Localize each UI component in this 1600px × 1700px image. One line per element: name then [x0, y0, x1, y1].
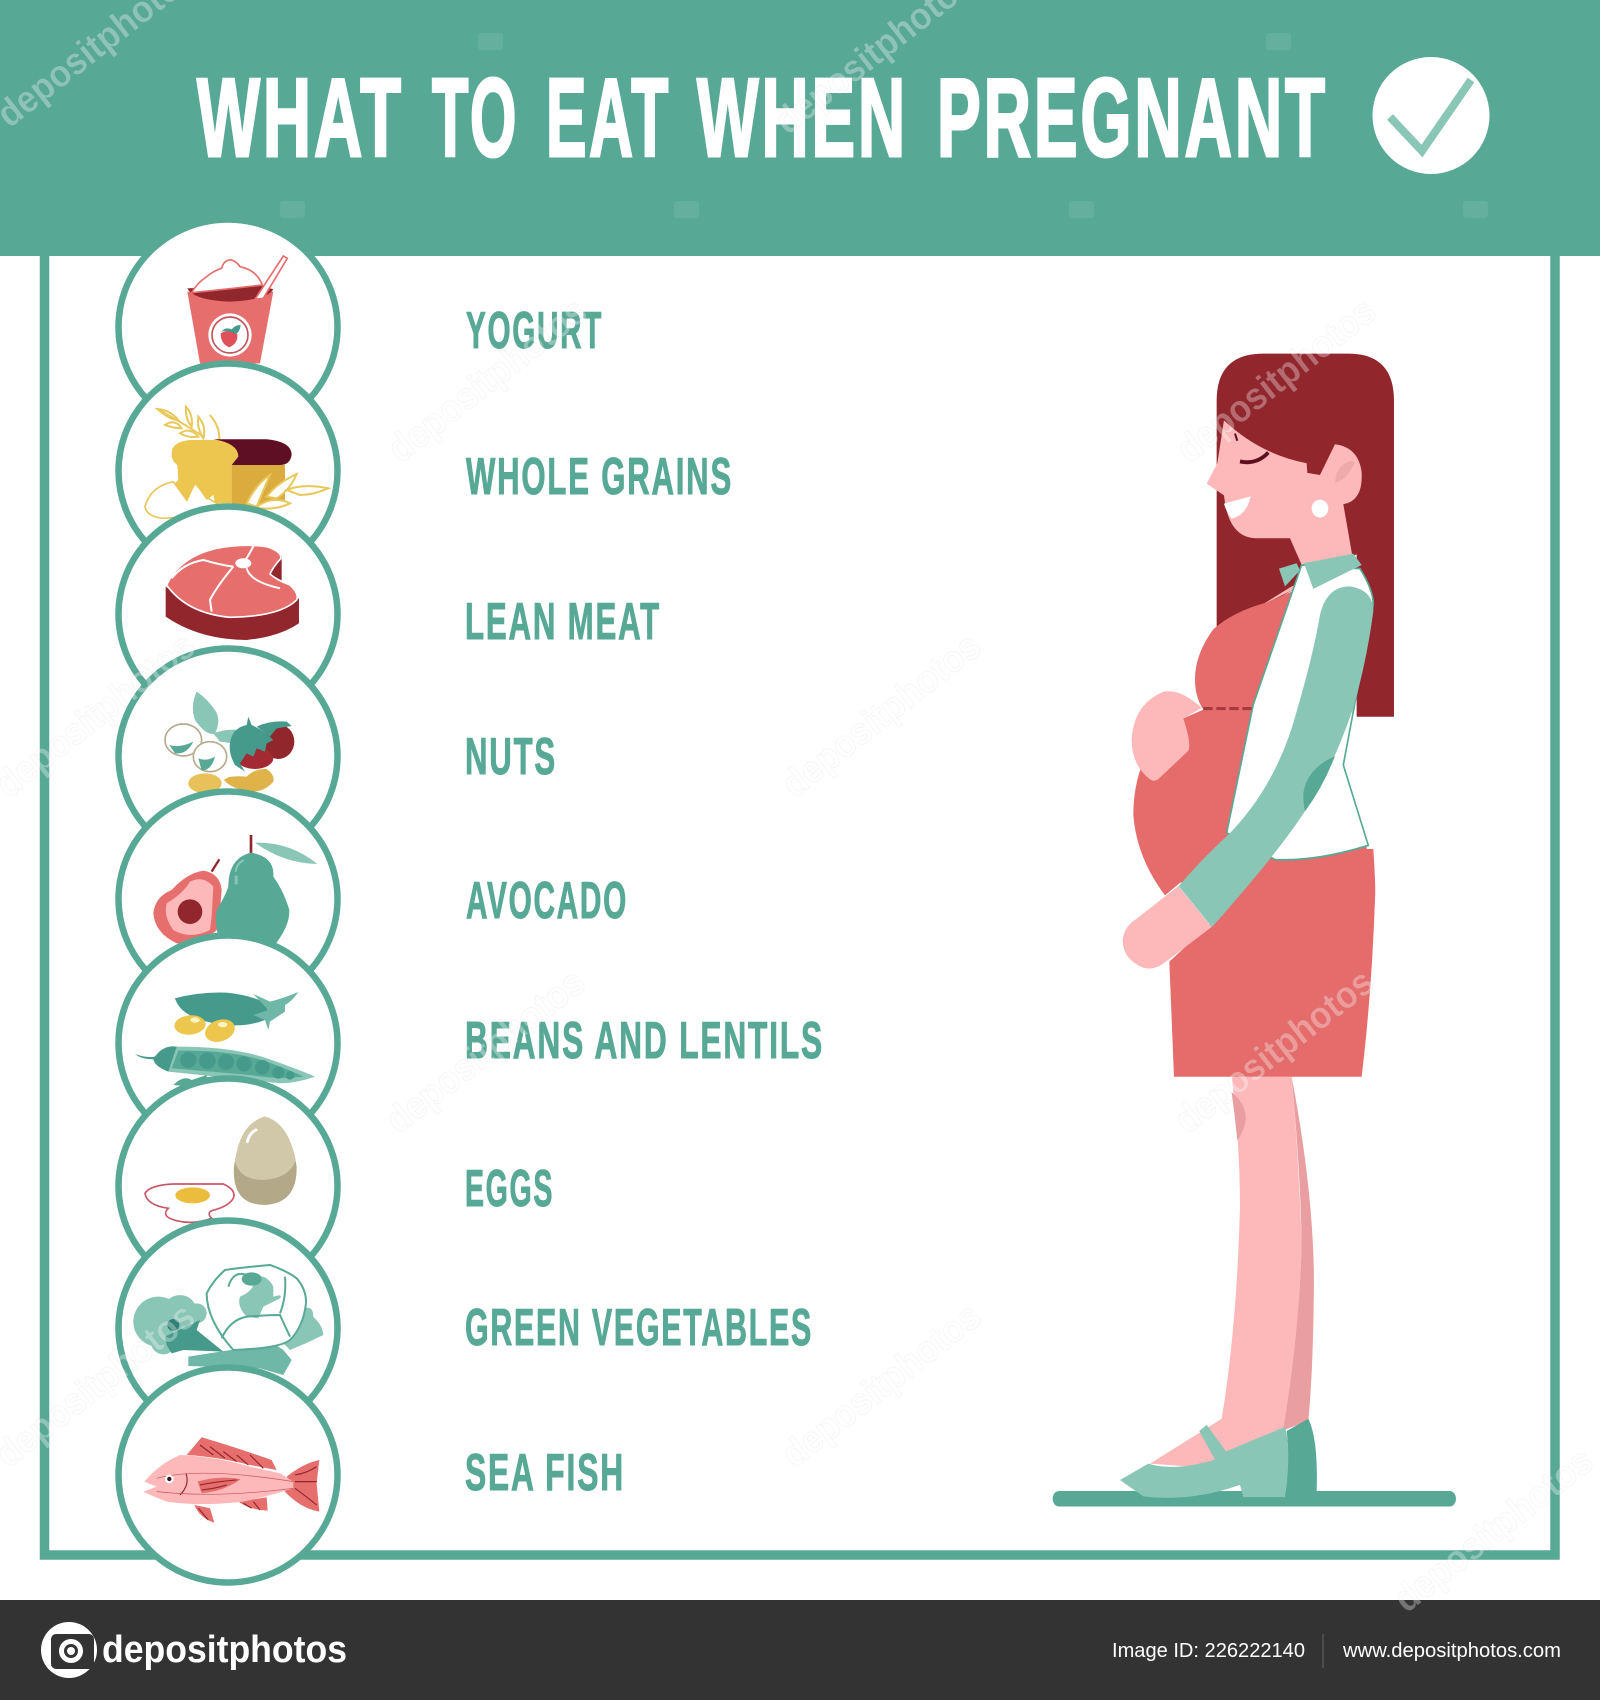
- legs and shoes: [1053, 847, 1456, 1507]
- label: yogurt: YOGURT: [466, 302, 603, 360]
- head, torso and arms: [1132, 420, 1373, 927]
- food item: nuts: [118, 648, 338, 864]
- food item: whole grains: [118, 364, 338, 578]
- footer logo wordmark: depositphotos: [102, 1629, 347, 1671]
- footer logo icon: [41, 1622, 97, 1678]
- label: nuts: NUTS: [465, 728, 557, 786]
- title: WHAT: [197, 56, 404, 180]
- title: EAT: [546, 56, 671, 180]
- label: lean meat: LEAN MEAT: [465, 593, 661, 651]
- label: beans and lentils: BEANS AND LENTILS: [465, 1012, 824, 1070]
- label: whole grains: WHOLE GRAINS: [466, 448, 733, 506]
- label: avocado: AVOCADO: [466, 872, 628, 930]
- footer bar: [0, 1600, 1600, 1700]
- sleeve: [1179, 586, 1373, 927]
- header band: [0, 0, 1600, 256]
- food item: yogurt: [118, 220, 338, 434]
- lower hand: [1123, 886, 1212, 969]
- food item: avocado: [118, 792, 338, 1006]
- title: TO: [432, 56, 519, 180]
- food item: beans and lentils: [118, 936, 338, 1150]
- food item: eggs: [118, 1078, 338, 1294]
- title: [197, 56, 1328, 180]
- title: PREGNANT: [937, 56, 1328, 180]
- food item: lean meat: [118, 506, 338, 722]
- watermarks: depositphotos: [378, 961, 593, 1142]
- label: green vegetables: GREEN VEGETABLES: [465, 1299, 813, 1357]
- watermarks: depositphotos: [774, 1295, 989, 1476]
- title: WHEN: [697, 56, 908, 180]
- dress seam: [1203, 704, 1252, 713]
- watermarks: depositphotos: [1169, 290, 1384, 471]
- upper hand: [1132, 691, 1202, 781]
- food item: green vegetables: [118, 1220, 338, 1436]
- dress: [1133, 592, 1367, 895]
- hair: [1217, 354, 1394, 717]
- footer url: www.depositphotos.com: [1342, 1640, 1561, 1662]
- label: eggs: EGGS: [465, 1160, 554, 1218]
- watermarks: depositphotos: [774, 625, 989, 806]
- watermarks: depositphotos: [380, 290, 595, 471]
- icon: check mark badge: [1372, 57, 1490, 174]
- content frame: [44, 200, 1555, 1555]
- illustration: pregnant woman: [1053, 354, 1456, 1507]
- food item: sea fish: [118, 1368, 338, 1582]
- jacket: [1227, 565, 1373, 860]
- watermarks: depositphotos: [1167, 961, 1382, 1142]
- label: sea fish: SEA FISH: [465, 1444, 625, 1502]
- footer image id: Image ID: 226222140: [1112, 1640, 1305, 1662]
